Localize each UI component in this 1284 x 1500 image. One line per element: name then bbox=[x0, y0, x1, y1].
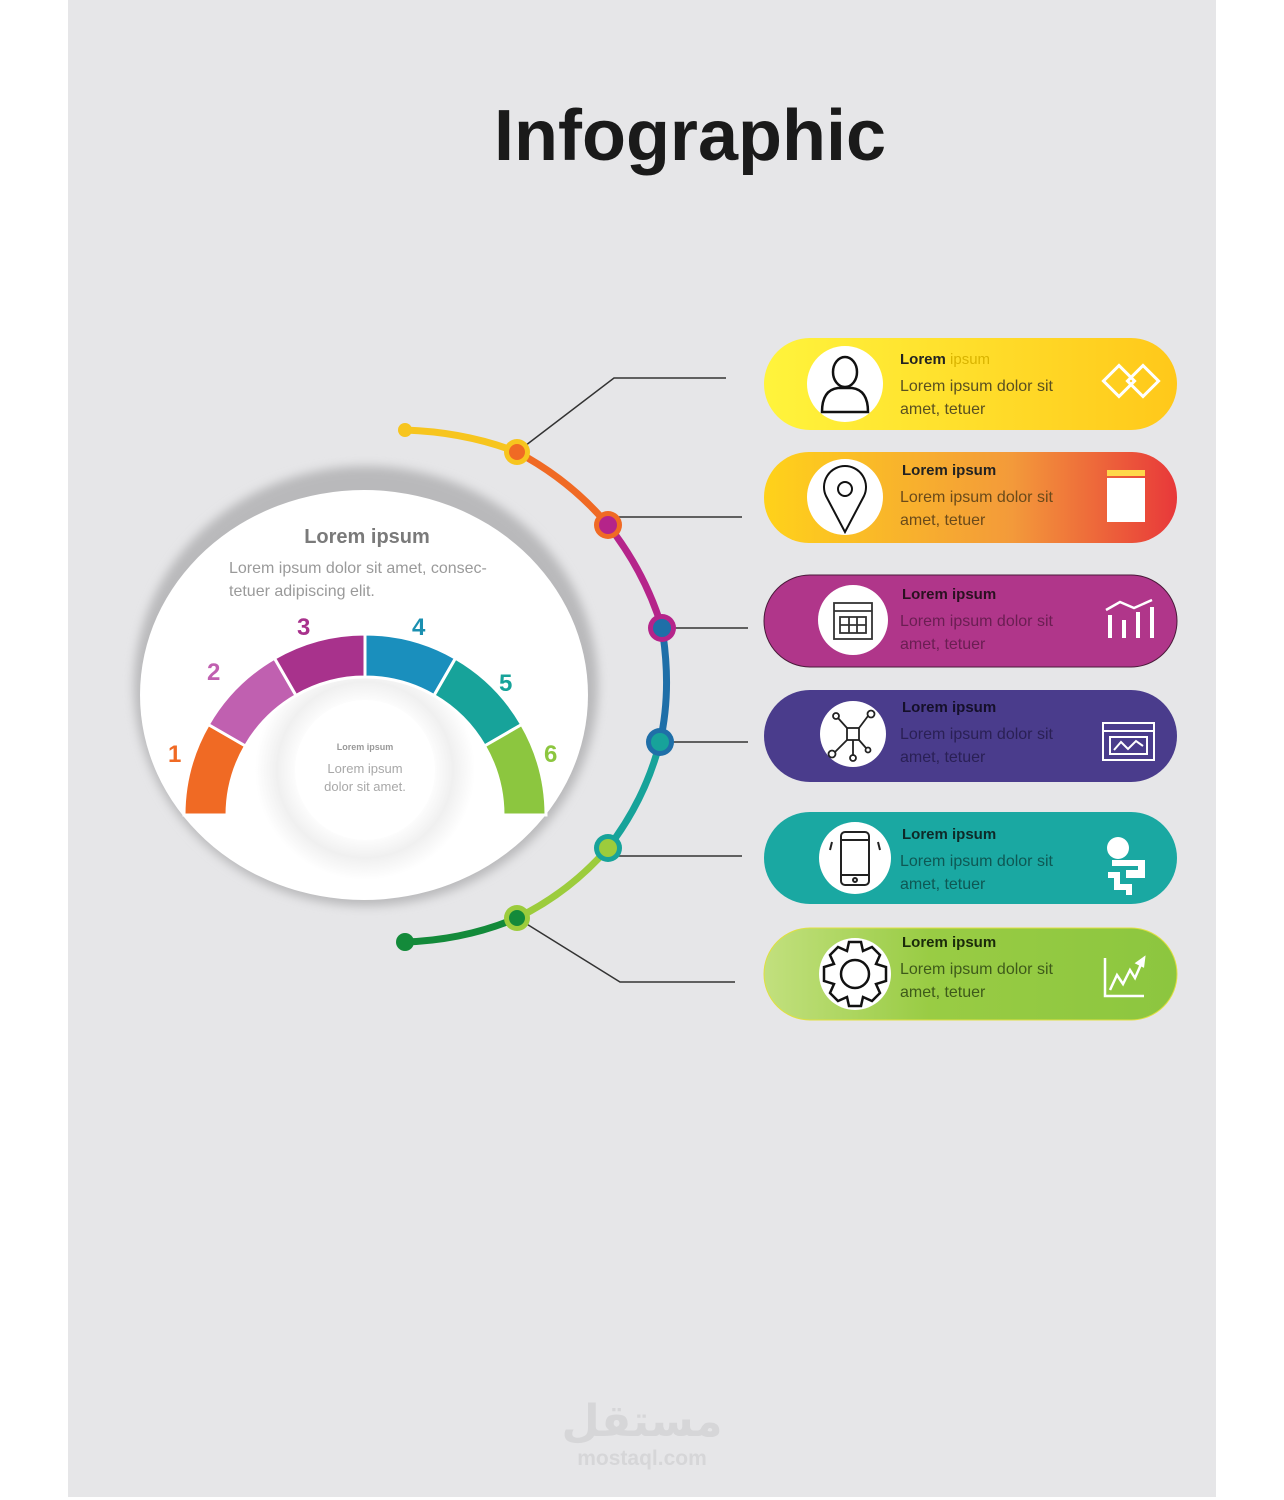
gauge numbers: 2 bbox=[207, 659, 220, 686]
icon: user bbox=[822, 357, 868, 412]
central circle panel: dolor sit amet. bbox=[324, 779, 406, 794]
icon: bar chart bbox=[1106, 600, 1152, 638]
icon: mobile phone bbox=[830, 832, 880, 885]
central circle panel: Lorem ipsum bbox=[327, 761, 403, 776]
icon: gear bbox=[824, 942, 886, 1006]
card 5: amet, tetuer bbox=[900, 876, 986, 893]
icon: network bbox=[828, 710, 874, 761]
gauge numbers: 4 bbox=[412, 614, 426, 641]
timeline dots bbox=[504, 439, 676, 931]
card 1: Lorem ipsum dolor sit bbox=[900, 378, 1054, 395]
watermark bbox=[562, 1396, 722, 1470]
icon: handshake bbox=[1103, 365, 1159, 397]
card 6: amet, tetuer bbox=[900, 984, 986, 1001]
card 5: Lorem ipsum bbox=[902, 826, 996, 843]
card 2: Lorem ipsum bbox=[902, 462, 996, 479]
card 2: amet, tetuer bbox=[900, 512, 986, 529]
central circle panel bbox=[134, 466, 598, 906]
gauge numbers: 1 bbox=[168, 741, 181, 768]
card 6 bbox=[764, 928, 1177, 1020]
icon: book bbox=[1107, 470, 1145, 522]
card 1: amet, tetuer bbox=[900, 401, 986, 418]
card 2 bbox=[764, 452, 1177, 543]
icon: line chart bbox=[1105, 958, 1144, 996]
gauge numbers bbox=[168, 614, 557, 768]
icon: person at desk bbox=[1107, 837, 1145, 895]
card 6: Lorem ipsum dolor sit bbox=[900, 961, 1054, 978]
connector lines bbox=[517, 378, 748, 982]
card 2: Lorem ipsum dolor sit bbox=[900, 489, 1054, 506]
card 4: Lorem ipsum bbox=[902, 699, 996, 716]
icon: location pin bbox=[824, 466, 866, 532]
card 3: Lorem ipsum dolor sit bbox=[900, 613, 1054, 630]
curved timeline arc bbox=[405, 430, 667, 942]
card 4: Lorem ipsum dolor sit bbox=[900, 726, 1054, 743]
icon: calendar bbox=[834, 603, 872, 639]
inner small circle bbox=[295, 700, 435, 840]
circle heading: Lorem ipsum bbox=[304, 526, 430, 548]
card 1: Lorem ipsum bbox=[900, 351, 990, 368]
card 5: Lorem ipsum dolor sit bbox=[900, 853, 1054, 870]
gauge numbers: 5 bbox=[499, 670, 512, 697]
circle description: Lorem ipsum dolor sit amet, consec- bbox=[229, 560, 487, 577]
central circle panel: Lorem ipsum bbox=[337, 742, 393, 752]
title: Infographic bbox=[494, 96, 886, 176]
card 3: Lorem ipsum bbox=[902, 586, 996, 603]
gauge bbox=[184, 634, 546, 815]
card 3: amet, tetuer bbox=[900, 636, 986, 653]
gauge numbers: 3 bbox=[297, 614, 310, 641]
icon: browser graph bbox=[1103, 723, 1154, 760]
card 1 bbox=[764, 338, 1177, 430]
card 4 bbox=[764, 690, 1177, 782]
watermark: mostaql.com bbox=[577, 1447, 707, 1470]
gauge numbers: 6 bbox=[544, 741, 557, 768]
card 6: Lorem ipsum bbox=[902, 934, 996, 951]
card 4: amet, tetuer bbox=[900, 749, 986, 766]
card 5 bbox=[764, 812, 1177, 904]
card 3 bbox=[764, 575, 1177, 667]
watermark: مستقل bbox=[562, 1396, 722, 1447]
arc endpoints bbox=[398, 423, 412, 437]
circle description: tetuer adipiscing elit. bbox=[229, 583, 375, 600]
